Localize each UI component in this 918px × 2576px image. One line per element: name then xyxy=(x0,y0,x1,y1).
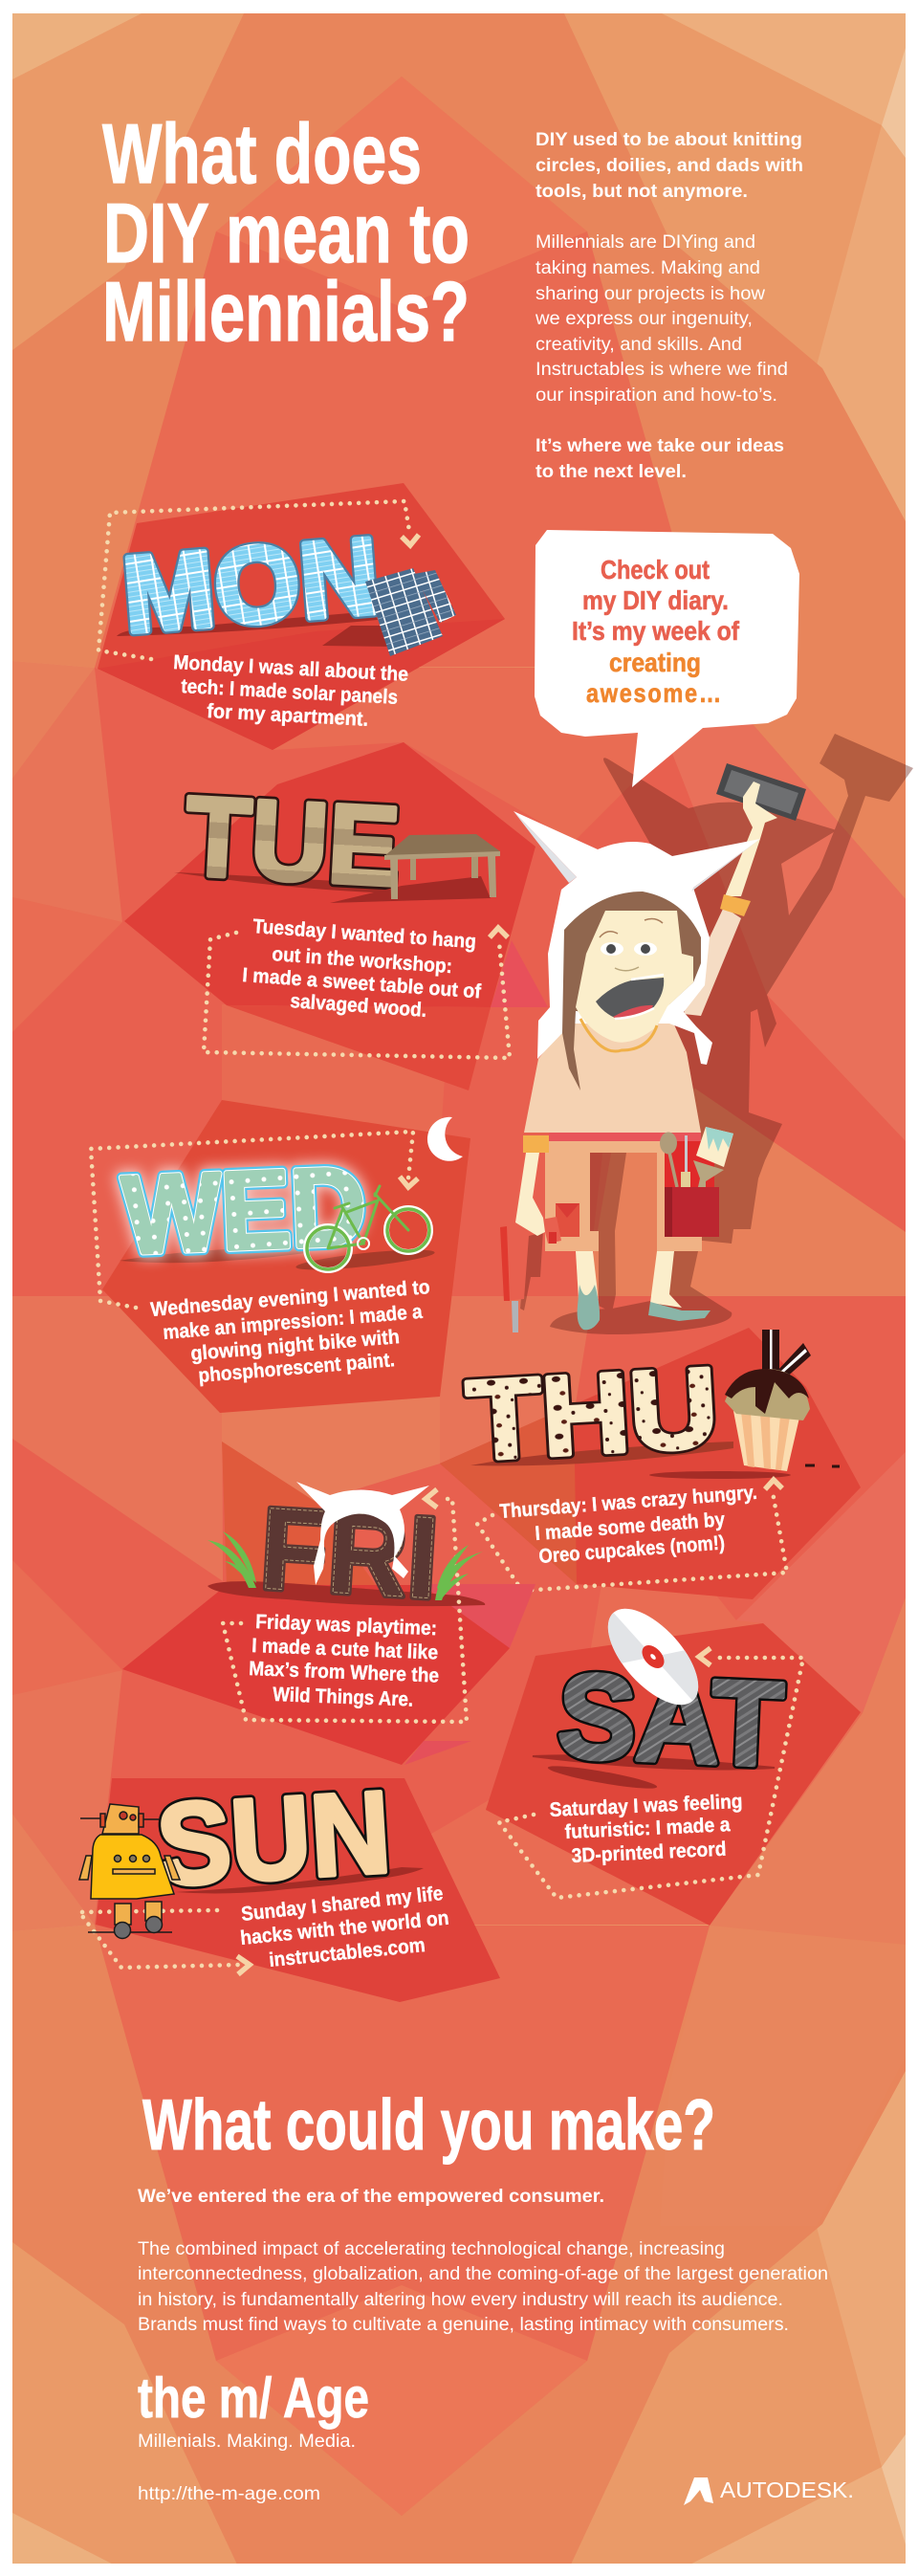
heading: what could you make: What could you make? xyxy=(142,2084,715,2165)
lettering: TUE: TUE xyxy=(183,773,403,911)
intro text block: It’s where we take our ideas xyxy=(536,436,784,456)
dotted arrow xyxy=(204,933,510,1058)
caption: I made a cute hat like xyxy=(251,1635,439,1663)
logo: autodesk xyxy=(684,2477,854,2505)
caption: out in the workshop: xyxy=(272,943,453,978)
shadow xyxy=(470,1442,791,1479)
panel: thursday xyxy=(440,1328,861,1599)
icon: cupcake xyxy=(725,1330,840,1471)
dotted arrow xyxy=(477,1492,787,1591)
panel: monday xyxy=(98,483,505,750)
tool pocket xyxy=(665,1187,719,1237)
title: DIY mean to xyxy=(103,186,470,280)
icon: hat xyxy=(296,1482,429,1585)
icon: record xyxy=(592,1594,714,1720)
intro text block: tools, but not anymore. xyxy=(536,182,748,202)
shadow xyxy=(174,872,397,893)
panel: wednesday xyxy=(91,1100,470,1413)
intro text block: we express our ingenuity, xyxy=(535,309,753,329)
panel: friday xyxy=(122,1442,536,1765)
caption: make an impression: I made a xyxy=(163,1301,424,1344)
cuff xyxy=(720,894,751,916)
url: http://the-m-age.com xyxy=(138,2484,320,2504)
lettering: SAT: SAT xyxy=(556,1649,786,1792)
lowered arm xyxy=(515,1153,545,1236)
caption: Sunday I shared my life xyxy=(240,1882,444,1926)
belt xyxy=(549,1133,701,1141)
drill xyxy=(500,1217,561,1332)
caption xyxy=(173,651,409,731)
caption: futuristic: I made a xyxy=(564,1814,731,1843)
lettering: THU: THU xyxy=(464,1345,721,1485)
icon: robot xyxy=(79,1804,180,1938)
lettering: TUE: TUE xyxy=(183,773,403,911)
arrow head xyxy=(426,1489,437,1508)
pocket xyxy=(556,1203,579,1237)
caption: Friday was playtime: xyxy=(255,1611,438,1640)
sleeve cuff xyxy=(523,1135,549,1153)
intro text block: creativity, and skills. And xyxy=(536,335,742,355)
intro text block: our inspiration and how-to’s. xyxy=(536,385,777,406)
closing text block: We’ve entered the era of the empowered consumer. xyxy=(138,2187,604,2207)
speech bubble: awesome… xyxy=(586,678,723,708)
speech bubble: Check out xyxy=(601,555,710,584)
arrow head xyxy=(402,535,419,545)
dotted arrow xyxy=(91,1132,413,1308)
caption: 3D-printed record xyxy=(571,1838,727,1867)
caption xyxy=(549,1791,743,1867)
caption: I made a sweet table out of xyxy=(242,964,483,1002)
caption xyxy=(150,1276,430,1387)
logo: autodesk: AUTODESK. xyxy=(720,2477,854,2502)
lettering: SUN: SUN xyxy=(153,1767,394,1910)
arrow head xyxy=(237,1956,250,1974)
lettering: WED: WED xyxy=(120,1145,368,1277)
panel: sunday xyxy=(79,1767,500,2002)
dotted arrow xyxy=(79,1910,239,1968)
closing text block: in history, is fundamentally altering how every industry will reach its audience. xyxy=(138,2290,783,2310)
title: What does xyxy=(102,106,422,201)
tool pocket back xyxy=(665,1141,714,1187)
caption: tech: I made solar panels xyxy=(181,675,399,709)
shoes xyxy=(578,1285,600,1330)
intro text block: Millennials are DIYing and xyxy=(536,232,755,253)
lettering: FRI: FRI xyxy=(256,1483,442,1623)
panel: tuesday xyxy=(124,742,548,1090)
face xyxy=(576,911,693,1043)
brand: the m/ Age: the m/ Age xyxy=(138,2367,369,2430)
shadow xyxy=(208,1581,485,1606)
closing text block: The combined impact of accelerating technological change, increasing xyxy=(138,2239,725,2259)
intro text block: to the next level. xyxy=(536,462,687,482)
intro text block: circles, doilies, and dads with xyxy=(536,156,803,176)
lettering: THU: THU xyxy=(464,1345,721,1485)
closing text block: interconnectedness, globalization, and the coming-of-age of the largest generation xyxy=(138,2264,828,2284)
raised arm xyxy=(684,907,741,1016)
closing text block: Brands must find ways to cultivate a genuine, lasting intimacy with consumers. xyxy=(138,2315,789,2335)
arrow head xyxy=(490,928,508,937)
caption: Oreo cupcakes (nom!) xyxy=(538,1531,726,1568)
icon: solar panels xyxy=(322,568,456,656)
title: Millennials? xyxy=(102,264,470,359)
character: shadow xyxy=(520,734,913,1334)
caption xyxy=(239,1882,449,1971)
character xyxy=(500,763,806,1332)
speech bubble: my DIY diary. xyxy=(582,585,729,615)
caption: hacks with the world on xyxy=(239,1907,449,1949)
legs xyxy=(576,1251,600,1315)
lettering: SAT: SAT xyxy=(556,1649,786,1792)
caption: for my apartment. xyxy=(207,700,369,731)
eyes xyxy=(600,919,663,971)
icon: moon xyxy=(427,1117,463,1161)
mouth xyxy=(596,975,664,1019)
intro text block: Instructables is where we find xyxy=(536,360,788,380)
caption xyxy=(242,915,483,1022)
lettering: WED: WED xyxy=(120,1145,368,1277)
glow: WED xyxy=(120,1145,368,1277)
lettering: FRI: FRI xyxy=(256,1483,442,1623)
shadow xyxy=(120,1245,435,1274)
caption: Wednesday evening I wanted to xyxy=(150,1276,430,1321)
tagline: Millenials. Making. Media. xyxy=(138,2432,356,2452)
caption: Wild Things Are. xyxy=(273,1684,414,1711)
intro text block: taking names. Making and xyxy=(536,258,760,278)
intro text block: sharing our projects is how xyxy=(536,284,765,304)
speech bubble xyxy=(535,530,799,787)
shorts xyxy=(545,1141,702,1251)
caption: phosphorescent paint. xyxy=(198,1349,396,1387)
caption: Thursday: I was crazy hungry. xyxy=(499,1482,758,1523)
speech bubble: It’s my week of xyxy=(572,616,740,646)
arrow head xyxy=(699,1648,710,1665)
tools xyxy=(660,1127,733,1187)
arrow head xyxy=(765,1480,782,1489)
icon: grass xyxy=(208,1531,483,1600)
shadow xyxy=(533,1755,775,1793)
caption: Tuesday I wanted to hang xyxy=(252,915,477,953)
shadow xyxy=(117,611,378,636)
phone xyxy=(716,763,806,821)
dotted arrow xyxy=(98,501,409,659)
icon: bicycle xyxy=(306,1186,430,1270)
lettering: WED: WED xyxy=(120,1145,368,1277)
panel: saturday xyxy=(486,1594,861,1926)
caption xyxy=(249,1611,440,1711)
intro text block: DIY used to be about knitting xyxy=(536,130,802,150)
speech bubble: creating xyxy=(609,648,701,677)
caption: I made some death by xyxy=(535,1508,726,1545)
hair xyxy=(562,892,701,1090)
hand and forearm xyxy=(725,782,777,896)
dotted arrow xyxy=(499,1658,803,1898)
caption xyxy=(499,1482,758,1568)
caption: glowing night bike with xyxy=(190,1326,401,1365)
lettering: SUN: SUN xyxy=(153,1767,394,1910)
necklace xyxy=(580,1019,657,1051)
caption: salvaged wood. xyxy=(290,990,427,1022)
arrow head xyxy=(400,1177,418,1187)
intro text block xyxy=(535,130,803,482)
caption: Saturday I was feeling xyxy=(549,1791,743,1821)
hat xyxy=(514,811,760,1065)
dotted arrow xyxy=(223,1499,467,1722)
caption: Monday I was all about the xyxy=(173,651,409,686)
icon: table xyxy=(330,834,500,903)
shadow xyxy=(175,1867,424,1893)
shirt xyxy=(524,1014,701,1133)
title xyxy=(102,106,470,359)
caption: Max’s from Where the xyxy=(249,1658,440,1687)
caption: instructables.com xyxy=(268,1934,426,1971)
lettering: MON: MON xyxy=(119,515,383,655)
closing text block xyxy=(138,2187,828,2335)
lettering: MON: MON xyxy=(119,515,383,655)
